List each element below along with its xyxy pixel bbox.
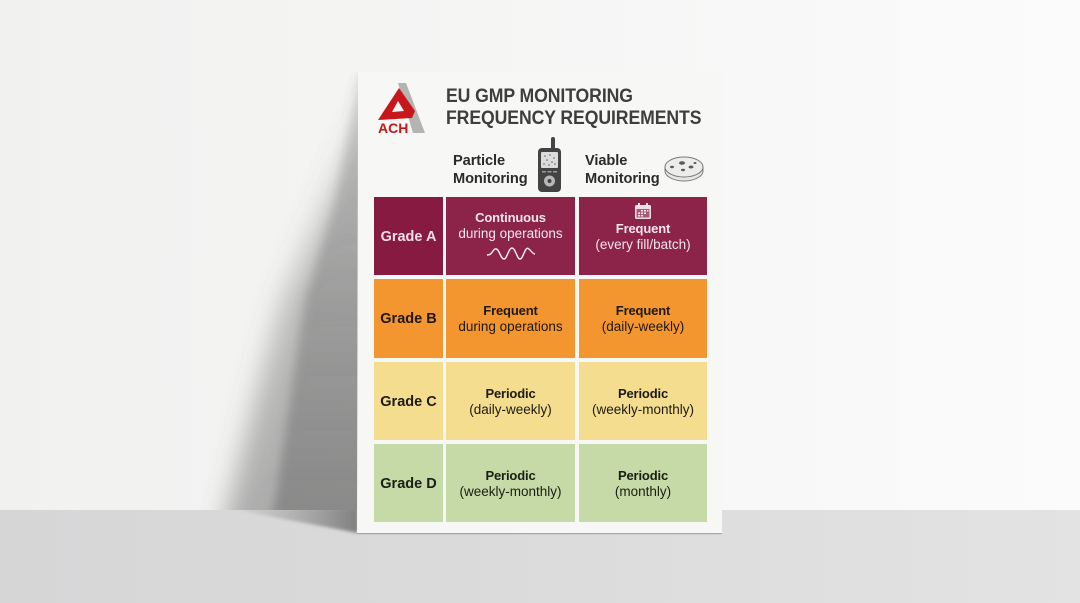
cell: grade A particle xyxy=(446,197,575,275)
icon: ACH logo xyxy=(378,83,425,136)
heading: viable monitoring: Viable xyxy=(584,152,627,169)
icon: particle counter xyxy=(538,137,561,192)
icon: ACH logo: ACH xyxy=(378,120,408,136)
cell: grade C viable: Periodic xyxy=(618,386,668,400)
floor xyxy=(0,510,1080,603)
cell: grade B viable: Frequent xyxy=(616,302,670,318)
heading: viable monitoring xyxy=(584,152,659,187)
cell: grade A particle: during operations xyxy=(458,226,563,241)
cell: grade D particle: (weekly-monthly) xyxy=(459,484,562,498)
cell: grade D viable: (monthly) xyxy=(615,484,671,498)
cell: grade A viable: Frequent xyxy=(616,221,670,236)
cell: grade A viable: (every fill/batch) xyxy=(595,237,691,252)
label: grade C: Grade C xyxy=(380,394,437,410)
table: grades xyxy=(374,197,707,522)
cell: grade B viable: (daily-weekly) xyxy=(602,318,684,334)
cell: grade C viable xyxy=(579,362,707,440)
cell: grade C particle: Periodic xyxy=(485,386,536,400)
heading: particle monitoring: Monitoring xyxy=(452,170,527,187)
cell: grade A viable xyxy=(579,197,707,275)
title: EU GMP MONITORING xyxy=(446,85,633,107)
poster sheet xyxy=(357,148,722,534)
heading: viable monitoring: Monitoring xyxy=(584,170,659,187)
cell: grade D viable: Periodic xyxy=(618,468,668,482)
cell: grade D viable xyxy=(579,444,707,522)
label: grade B: Grade B xyxy=(380,311,437,327)
cell: grade C particle: (daily-weekly) xyxy=(469,402,552,416)
cell: grade B viable xyxy=(579,279,707,358)
cell: grade C particle xyxy=(446,362,575,440)
label: grade A: Grade A xyxy=(381,228,436,244)
title xyxy=(446,85,701,129)
heading: particle monitoring: Particle xyxy=(452,152,505,169)
cell: grade B particle xyxy=(446,279,575,358)
cell: grade D particle xyxy=(446,444,575,522)
title: FREQUENCY REQUIREMENTS xyxy=(446,107,701,129)
icon: petri dish xyxy=(664,156,704,182)
label: grade A xyxy=(374,197,443,275)
label: grade D xyxy=(374,444,443,522)
label: grade C xyxy=(374,362,443,440)
label: grade B xyxy=(374,279,443,358)
cell: grade D particle: Periodic xyxy=(485,468,536,482)
cell: grade B particle: Frequent xyxy=(483,302,538,318)
cell: grade B particle: during operations xyxy=(458,318,563,334)
cell: grade A particle: Continuous xyxy=(475,210,546,225)
cell: grade C viable: (weekly-monthly) xyxy=(592,402,694,416)
label: grade D: Grade D xyxy=(380,476,437,492)
heading: particle monitoring xyxy=(452,152,527,187)
poster xyxy=(357,83,722,534)
poster shadow xyxy=(212,74,358,534)
